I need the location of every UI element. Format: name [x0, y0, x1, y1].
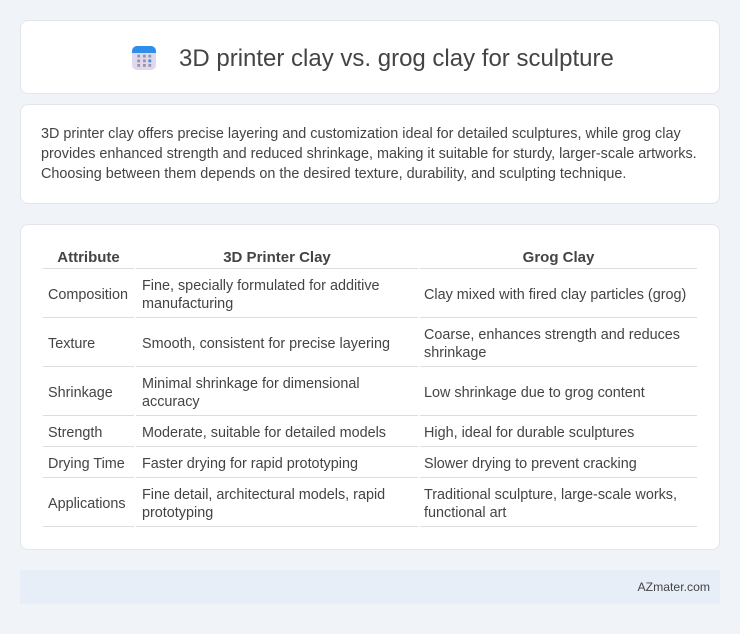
row: texture: Coarse, enhances strength and reduces [424, 327, 680, 343]
row: composition: manufacturing [142, 296, 233, 312]
panel: comparison table card [20, 224, 720, 550]
row: texture: Smooth, consistent for precise layering [142, 336, 390, 352]
icon: calendar [132, 46, 156, 70]
row: composition: Fine, specially formulated for additive [142, 278, 380, 294]
row: composition [48, 278, 686, 312]
row: applications: Traditional sculpture, large-scale works, [424, 487, 677, 503]
footer brand text: AZmater.com [638, 580, 710, 594]
row: drying time: Slower drying to prevent cracking [424, 456, 637, 472]
row: shrinkage: accuracy [142, 394, 200, 410]
row: drying time [48, 456, 637, 472]
table header: Attribute [57, 249, 120, 266]
row: applications: prototyping [142, 505, 213, 521]
row: strength: High, ideal for durable sculptures [424, 425, 634, 441]
table header: 3D Printer Clay [223, 249, 331, 266]
row: strength: Moderate, suitable for detailed models [142, 425, 386, 441]
row: shrinkage: Shrinkage [48, 385, 113, 401]
table header [57, 249, 594, 266]
row: applications: functional art [424, 505, 506, 521]
footer bar [20, 570, 720, 604]
row: composition: Clay mixed with fired clay particles (grog) [424, 287, 686, 303]
row: shrinkage [48, 376, 645, 410]
row: composition: Composition [48, 287, 128, 303]
row: applications: Fine detail, architectural models, rapid [142, 487, 385, 503]
title: 3D printer clay vs. grog clay for sculpture [179, 45, 614, 72]
row: drying time: Drying Time [48, 456, 125, 472]
comparison table [43, 249, 697, 527]
row: texture [48, 327, 680, 361]
row: strength: Strength [48, 425, 102, 441]
row: shrinkage: Low shrinkage due to grog content [424, 385, 645, 401]
table header: Grog Clay [523, 249, 594, 266]
row: applications: Applications [48, 496, 126, 512]
summary text: Choosing between them depends on the desired texture, durability, and sculpting technique. [41, 166, 626, 182]
row: applications [48, 487, 677, 521]
summary text [41, 126, 697, 182]
row: drying time: Faster drying for rapid prototyping [142, 456, 358, 472]
summary text: 3D printer clay offers precise layering and customization ideal for detailed sculptures, while grog clay [41, 126, 681, 142]
panel: title card [20, 20, 720, 94]
panel: summary card [20, 104, 720, 204]
summary text: provides enhanced strength and reduced shrinkage, making it suitable for sturdy, larger-scale artworks. [41, 146, 697, 162]
row: texture: Texture [48, 336, 95, 352]
row: texture: shrinkage [424, 345, 486, 361]
row: strength [48, 425, 634, 441]
row: shrinkage: Minimal shrinkage for dimensional [142, 376, 360, 392]
